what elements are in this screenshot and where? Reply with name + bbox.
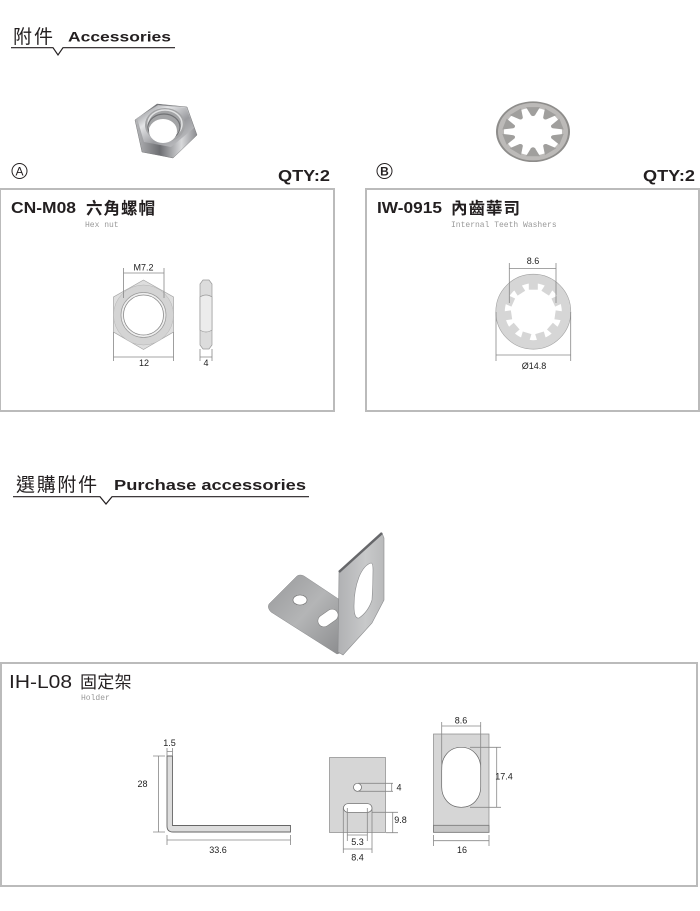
label: B (377, 164, 392, 178)
dimension: 9.8 (372, 812, 407, 833)
bracket slot (316, 607, 340, 629)
dimension: 9.8: 9.8 (394, 815, 407, 825)
dimension: 17.4: 17.4 (495, 772, 513, 782)
dimension: 8.6: 8.6 (455, 716, 467, 726)
dimension: 16 (434, 835, 489, 855)
dimension: 1.5: 1.5 (163, 738, 176, 748)
dimension: 5.3: 5.3 (351, 837, 364, 847)
panel title: CN-M08: CN-M08 (11, 200, 76, 217)
panel: washer IW-0915 (366, 189, 699, 411)
dimension: 12: 12 (139, 358, 149, 368)
dimension: 4 (200, 349, 212, 368)
dimension: 16: 16 (457, 845, 467, 855)
drawing: holder base plate (330, 758, 386, 832)
drawing: hex nut side view (200, 280, 212, 349)
heading: Accessories (11, 26, 175, 55)
bracket round hole (293, 595, 307, 605)
drawing: holder upright plate (434, 734, 489, 832)
drawing: washer (496, 274, 571, 349)
dimension: 33.6 (167, 835, 290, 855)
quantity A: QTY:2 (278, 168, 330, 185)
drawing: hex nut front view (114, 280, 174, 350)
bracket floor plate (268, 575, 340, 654)
bracket top edge (339, 533, 382, 572)
quantity B: QTY:2 (643, 168, 695, 185)
panel title Chinese: 內齒華司 (451, 199, 521, 218)
dimension: 4 (358, 782, 402, 792)
dimension: M7.2 (124, 262, 164, 298)
subtitle: Hex nut (85, 221, 119, 230)
dimension: 8.4 (343, 808, 372, 862)
dimension: 1.5 (163, 738, 176, 756)
heading: Accessories: 附件 (13, 26, 55, 48)
dimension: 8.6 (442, 716, 481, 770)
dimension: 4: 4 (203, 358, 209, 368)
dimension: diameter 14.8: Ø14.8 (522, 361, 546, 371)
panel title Chinese: 固定架 (80, 673, 132, 692)
dimension: 28 (137, 756, 165, 832)
dimension: 4: 4 (396, 782, 402, 792)
dimension: 12 (114, 332, 174, 368)
dimension: 8.6 (509, 256, 556, 303)
dimension: 17.4 (470, 747, 513, 807)
photo: L-shaped holder bracket (268, 533, 384, 655)
dimension: 8.4: 8.4 (351, 852, 364, 862)
dimension: 5.3 (347, 808, 367, 847)
dimension: diameter 14.8 (496, 312, 571, 371)
subtitle: Internal Teeth Washers (451, 221, 557, 230)
panel title: IH-L08: IH-L08 (9, 672, 72, 692)
heading: Purchase accessories: 選購附件 (16, 474, 99, 496)
dimension: 28: 28 (137, 779, 148, 789)
heading: Purchase accessories (13, 474, 309, 504)
panel title Chinese: 六角螺帽 (86, 198, 156, 218)
panel: holder IH-L08 (1, 663, 697, 886)
dimension: 33.6: 33.6 (209, 845, 227, 855)
bracket upright plate (338, 533, 384, 655)
photo: internal teeth washer (496, 101, 570, 162)
panel: hex nut CN-M08 (0, 189, 334, 411)
label: A: A (15, 164, 24, 178)
photo: hex nut (135, 104, 197, 158)
label: B: B (380, 164, 389, 178)
heading: Accessories: Accessories (68, 30, 171, 44)
dimension: 8.6: 8.6 (527, 256, 539, 266)
drawing: holder side profile (167, 756, 290, 832)
panel title: IW-0915: IW-0915 (377, 200, 442, 217)
subtitle: Holder (81, 694, 110, 703)
dimension: M7.2: M7.2 (133, 262, 154, 272)
heading: Purchase accessories: Purchase accessories (114, 478, 306, 494)
label: A (12, 164, 27, 178)
